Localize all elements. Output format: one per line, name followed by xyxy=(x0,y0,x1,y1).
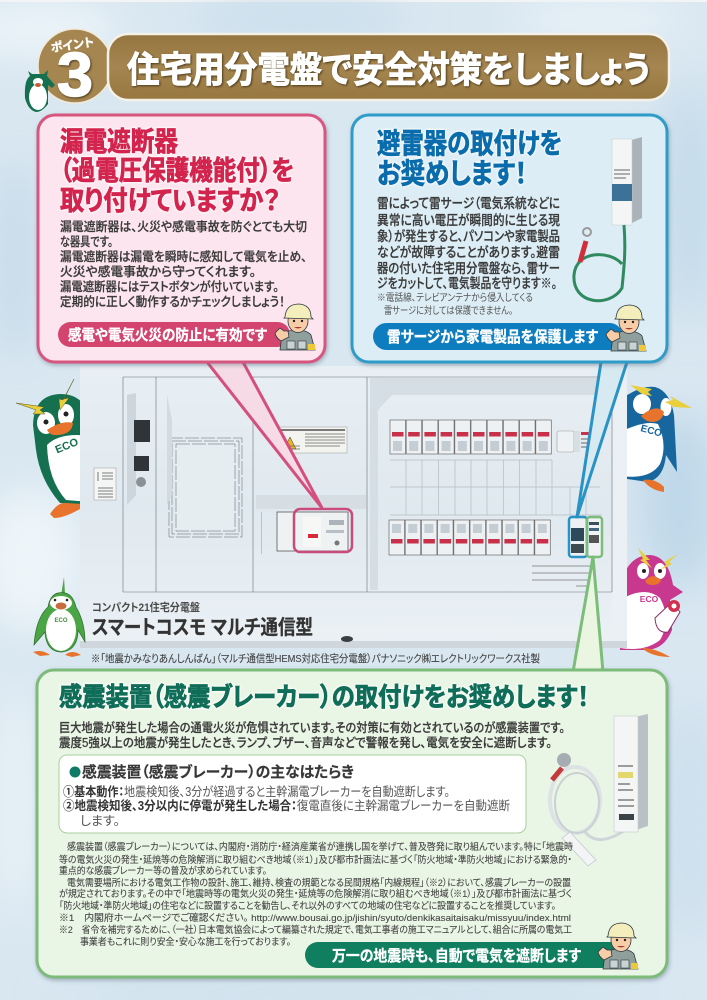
heading: （過電圧保護機能付）を xyxy=(60,156,294,186)
illustration: earthquake breaker device xyxy=(550,714,648,866)
surge arrester module xyxy=(570,519,585,555)
penguin: large dark green with lightning xyxy=(16,379,90,518)
penguin: large dark green with lightning: ECO xyxy=(54,436,81,456)
note: ※電話線、テレビアンテナから侵入してくる xyxy=(377,291,533,304)
penguin: small green: ECO xyxy=(54,618,68,624)
note: 雷サージに対しては保護できません。 xyxy=(384,304,513,317)
body text: などが故障することがあります。避雷 xyxy=(377,244,560,260)
body text: 器の付いた住宅用分電盤なら、雷サー xyxy=(377,261,560,276)
penguin: blue with lightning: ECO xyxy=(639,423,663,440)
small switch xyxy=(557,431,592,452)
body text: ジをカットして、電気製品を守ります※。 xyxy=(377,276,557,291)
heading: 取り付けていますか？ xyxy=(60,186,280,216)
board door frame lines xyxy=(123,377,612,592)
explanatory text xyxy=(59,841,573,948)
body text: 漏電遮断器は漏電を瞬時に感知して電気を止め、 xyxy=(60,249,307,264)
body text xyxy=(377,196,560,291)
heading: お奨めします！ xyxy=(377,158,527,189)
body text: 雷によって雷サージ（電気系統などに xyxy=(377,196,560,211)
callout bar: 雷サージから家電製品を保護します xyxy=(387,328,598,346)
function 2: します。 xyxy=(80,814,120,828)
body text: 漏電遮断器にはテストボタンが付いています。 xyxy=(60,279,279,294)
left switch strip xyxy=(127,393,150,505)
header xyxy=(25,29,669,112)
explanatory text: 電気需要場所における電気工作物の設計、施工、維持、検査の規範となる民間規格「内線規程」（※2）において、感震ブレーカーの設置 xyxy=(67,877,571,889)
body text: 火災や感電事故から守ってくれます。 xyxy=(60,264,256,279)
intro text: 震度5強以上の地震が発生したとき、ランプ、ブザー、音声などで警報を発し、電気を安全に遮断します。 xyxy=(59,735,552,750)
function 2 xyxy=(63,798,510,828)
explanatory text: が規定されております。その中で「地震時等の電気火災の発生・延焼等の危険解消に取り組むべき地域（※1）」及び都市計画法に基づく xyxy=(59,888,572,900)
bottom row breakers xyxy=(389,520,550,555)
header point badge: ポイント xyxy=(50,35,95,55)
earth leakage breaker module xyxy=(261,512,348,554)
panel: surge arrester xyxy=(352,115,667,362)
header title bar xyxy=(108,34,669,100)
icon: worker xyxy=(598,923,638,969)
pointer: green wedge to earthquake breaker xyxy=(573,517,603,672)
product name small: コンパクト21住宅分電盤 xyxy=(92,600,200,614)
header title bar: 住宅用分電盤で安全対策をしましょう xyxy=(127,49,650,90)
central window xyxy=(169,438,242,537)
body text: な器具です。 xyxy=(60,235,113,249)
body text: 定期的に正しく動作するかチェックしましょう！ xyxy=(60,294,285,309)
callout bar xyxy=(373,323,623,350)
door handle xyxy=(341,636,353,642)
function 2: ②地震検知後、3分以内に停電が発生した場合：復電直後に主幹漏電ブレーカーを自動遮断 xyxy=(63,798,510,813)
explanatory text: 重点的な感震ブレーカー等の普及が求められています。 xyxy=(59,865,267,877)
explanatory text: 等の電気火災の発生・延焼等の危険解消に取り組むべき地域（※1）」及び都市計画法に基づく「防火地域・準防火地域」における緊急的・ xyxy=(59,854,572,866)
tiny notice text block xyxy=(532,566,590,586)
penguin mascot beside badge xyxy=(25,70,55,112)
illustration: surge arrester device xyxy=(574,137,642,301)
header point badge: 3 xyxy=(57,41,93,110)
penguin: pink with baby: ECO xyxy=(640,594,659,604)
pointer: pink wedge to earth leakage breaker xyxy=(207,362,352,552)
distribution board xyxy=(80,366,627,648)
heading xyxy=(377,128,562,189)
heading: 漏電遮断器 xyxy=(60,127,178,157)
body text xyxy=(60,219,307,309)
heading: 避雷器の取付けを xyxy=(377,128,562,159)
panel: earthquake breaker xyxy=(37,670,667,977)
explanatory text: 「防火地域・準防火地域」の住宅などに設置することを勧告し、それ以外のすべての地域の住宅などに設置することを推奨しています。 xyxy=(59,900,556,912)
warning sticker left xyxy=(94,468,116,500)
explanatory text: ※1 内閣府ホームページでご確認ください。 http://www.bousai.go.jp/jishin/syuto/denkikasaitaisaku/missyuu/index.html xyxy=(59,912,571,924)
top row breakers xyxy=(390,420,551,454)
caution label xyxy=(278,427,347,453)
heading xyxy=(60,127,294,216)
function 1: ①基本動作：地震検知後、3分が経過すると主幹漏電ブレーカーを自動遮断します。 xyxy=(63,784,450,799)
penguin: blue with lightning xyxy=(620,385,692,492)
intro text xyxy=(59,720,565,750)
note xyxy=(377,291,533,317)
product name large: スマートコスモ マルチ通信型 xyxy=(92,616,313,639)
earthquake breaker module xyxy=(587,519,601,555)
panel: earth leakage breaker xyxy=(38,115,325,362)
body text: 漏電遮断器は、火災や感電事故を防ぐとても大切 xyxy=(60,219,307,234)
explanatory text: 感震装置（感震ブレーカー）については、内閣府・消防庁・経済産業省が連携し国を挙げて、普及啓発に取り組んでいます。特に「地震時 xyxy=(67,841,573,853)
box heading: 感震装置（感震ブレーカー）の主なはたらき xyxy=(82,763,354,781)
penguin: pink with baby xyxy=(620,548,683,657)
heading: 感震装置（感震ブレーカー）の取付けをお奨めします！ xyxy=(59,682,589,712)
body text: 異常に高い電圧が瞬間的に生じる現 xyxy=(377,212,560,228)
callout bar xyxy=(305,942,625,968)
callout bar xyxy=(58,322,290,347)
footnote under board: ※「地震かみなりあんしんばん」（マルチ通信型HEMS対応住宅分電盤）パナソニック㈱エレクトリックワークス社製 xyxy=(91,652,540,665)
header point badge xyxy=(38,29,112,110)
explanatory text: ※2 省令を補完するために、（一社）日本電気協会によって編纂された規定で、電気工事者の施工マニュアルとして、組合に所属の電気工 xyxy=(59,924,572,936)
white box: main functions xyxy=(59,755,526,833)
penguin: small green xyxy=(33,577,85,657)
middle label area xyxy=(390,460,602,515)
icon: worker xyxy=(606,305,646,351)
icon: worker xyxy=(275,304,315,350)
body text: 象）が発生すると、パソコンや家電製品 xyxy=(377,228,560,244)
explanatory text: 事業者もこれに則り安全・安心な施工を行っております。 xyxy=(80,936,291,948)
callout bar: 感電や電気火災の防止に有効です xyxy=(68,326,268,344)
callout bar: 万一の地震時も、自動で電気を遮断します xyxy=(332,946,581,965)
intro text: 巨大地震が発生した場合の通電火災が危惧されています。その対策に有効とされているのが感震装置です。 xyxy=(59,720,565,735)
pointer: blue wedge to surge arrester xyxy=(569,362,627,557)
